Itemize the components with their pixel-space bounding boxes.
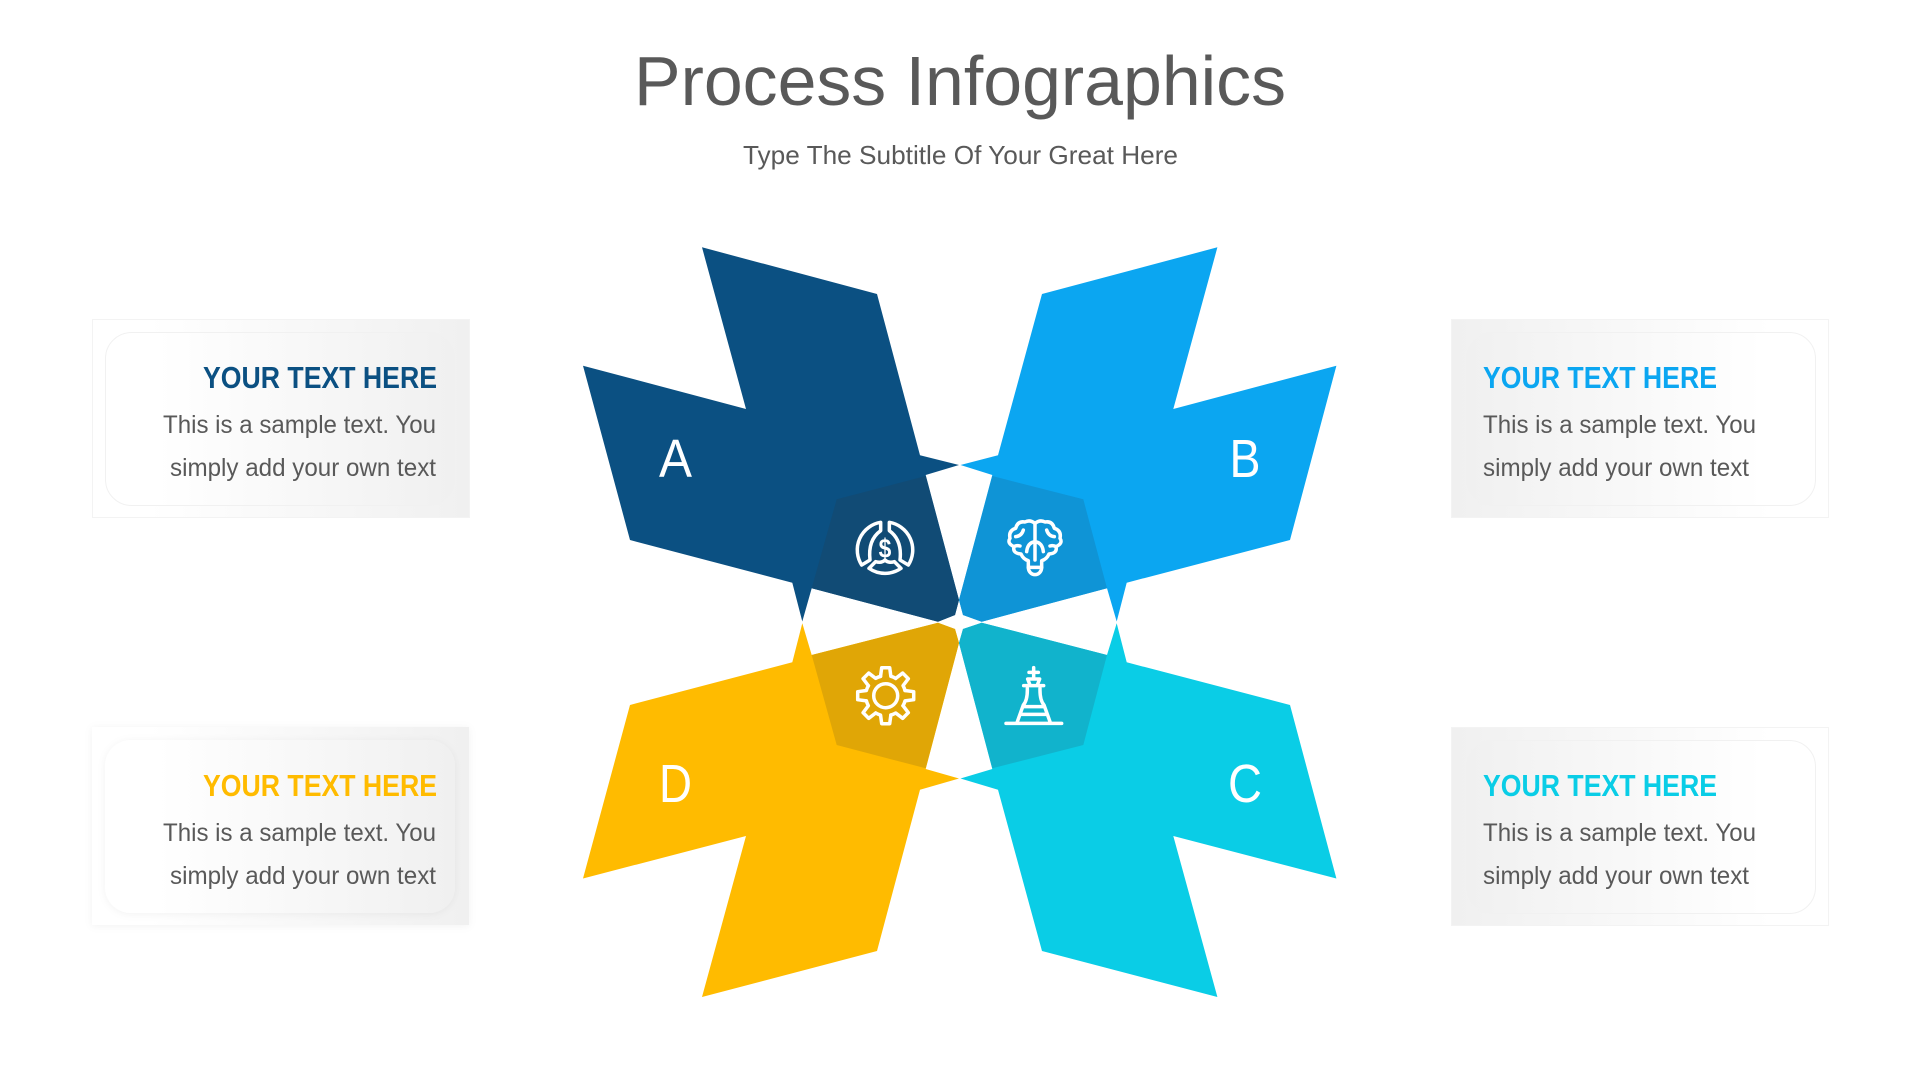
overlay A (812, 476, 959, 622)
icon: gear (858, 668, 914, 724)
heading B: YOUR TEXT HERE (1483, 360, 1717, 395)
overlay C (959, 623, 1107, 768)
body text B (1483, 411, 1756, 482)
letter D: D (659, 754, 692, 814)
shape C (959, 623, 1336, 997)
body text A (163, 411, 436, 482)
shape D (583, 623, 959, 997)
body text C (1483, 819, 1756, 890)
body text A: simply add your own text (170, 454, 436, 482)
heading D: YOUR TEXT HERE (203, 768, 437, 803)
letter C: C (1228, 754, 1262, 814)
letter B: B (1230, 429, 1260, 489)
heading A: YOUR TEXT HERE (203, 360, 437, 395)
body text B: simply add your own text (1483, 454, 1749, 482)
shape A (583, 247, 959, 622)
icon: brain bulb (1009, 521, 1061, 575)
heading C: YOUR TEXT HERE (1483, 768, 1717, 803)
body text C: simply add your own text (1483, 862, 1749, 890)
body text D: simply add your own text (170, 862, 436, 890)
panel: B text box (1452, 320, 1828, 518)
body text A: This is a sample text. You (163, 411, 436, 439)
body text C: This is a sample text. You (1483, 819, 1756, 847)
icon: chess king (1006, 668, 1062, 723)
icon: dollar pie (857, 522, 913, 573)
panel: C text box (1452, 728, 1828, 926)
subtitle: Type The Subtitle Of Your Great Here (743, 140, 1178, 170)
overlay D (812, 623, 959, 768)
body text D: This is a sample text. You (163, 819, 436, 847)
title: Process Infographics (634, 42, 1286, 120)
body text B: This is a sample text. You (1483, 411, 1756, 439)
panel: A text box (92, 320, 470, 518)
shape B (959, 247, 1336, 622)
icon: dollar pie: $ (879, 533, 891, 563)
body text D (163, 819, 436, 890)
overlay B (959, 476, 1107, 622)
panel: D text box (92, 727, 469, 925)
letter A: A (659, 429, 692, 489)
